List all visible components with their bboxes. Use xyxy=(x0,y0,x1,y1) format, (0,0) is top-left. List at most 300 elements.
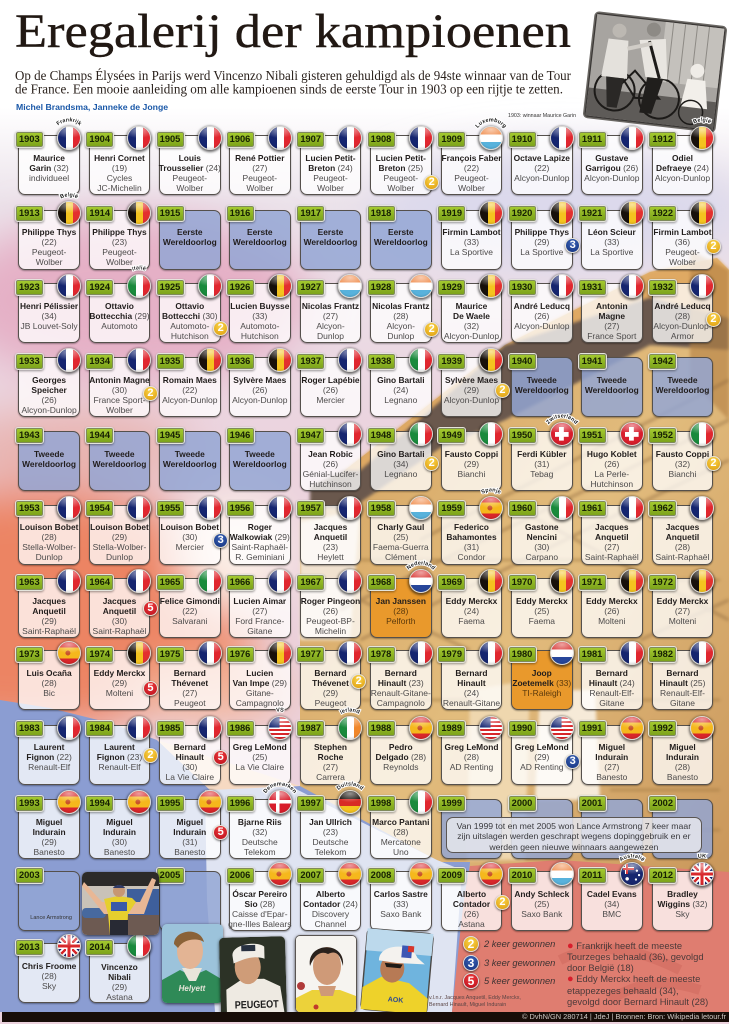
year tag xyxy=(578,280,606,294)
year tag xyxy=(438,280,465,294)
country label: Duitsland xyxy=(335,780,366,792)
year tag xyxy=(368,868,394,882)
year tag: 1986 xyxy=(230,723,250,733)
winner: (26) xyxy=(252,385,267,395)
year tag: 1985 xyxy=(160,723,180,733)
winner: Cycles xyxy=(107,173,132,183)
winner: Magne xyxy=(599,311,625,321)
year tag: 1930 xyxy=(512,282,532,292)
winner: Walkowiak (29) xyxy=(230,532,290,542)
legend item: 5 wins xyxy=(463,972,563,990)
year tag: 2002 xyxy=(652,798,673,808)
flag xyxy=(338,126,362,150)
badge: 2 wins: 2 xyxy=(499,896,505,908)
year tag xyxy=(508,501,536,516)
photo: Eddy Merckx: PEUGEOT xyxy=(235,998,279,1011)
year tag: 1934 xyxy=(89,356,110,366)
year tag xyxy=(226,796,254,810)
card 1931 xyxy=(578,273,644,345)
winner: Miguel xyxy=(106,817,133,827)
card 1991 xyxy=(578,715,644,787)
winner xyxy=(581,742,643,782)
winner: Hutchison xyxy=(171,331,209,341)
winner: Fausto Coppi xyxy=(656,449,709,459)
winner: Deutsche xyxy=(313,837,348,847)
winner: Speicher xyxy=(31,385,67,395)
winner xyxy=(370,889,432,919)
winner xyxy=(441,153,502,193)
winner: Sky xyxy=(675,909,690,919)
winner: (22) xyxy=(182,606,197,616)
flag xyxy=(408,496,432,520)
badge: 3 wins: 3 xyxy=(570,755,576,767)
flag xyxy=(620,422,644,446)
winner: gne-Illes Balears xyxy=(228,919,291,929)
winner: Bernard xyxy=(385,668,417,678)
card 1956 xyxy=(226,495,292,567)
year tag: 2011 xyxy=(582,870,602,880)
card 1941 xyxy=(578,347,644,419)
year tag xyxy=(508,646,536,662)
badge: 3 wins: 3 xyxy=(218,534,224,546)
winner: Joop xyxy=(532,668,552,678)
flag xyxy=(408,641,432,665)
winner: Banesto xyxy=(104,847,135,857)
winner: (29) xyxy=(534,237,549,247)
flag xyxy=(57,274,81,298)
winner: Peugeot- xyxy=(313,173,348,183)
flag xyxy=(479,716,503,740)
year tag: 1929 xyxy=(441,282,462,292)
winner: (31) xyxy=(464,542,479,552)
winner: Anquetil xyxy=(314,532,347,542)
year tag: 1948 xyxy=(371,430,391,440)
winner: Banesto xyxy=(33,847,65,857)
year tag xyxy=(649,796,676,810)
winner: Campagnolo xyxy=(236,698,284,708)
winner xyxy=(229,668,291,708)
card 1922 xyxy=(649,200,715,272)
winner: Wolber xyxy=(106,257,133,267)
winner: Renault-Elf xyxy=(28,762,70,772)
winner: Stella-Wolber- xyxy=(22,542,76,552)
year tag: 1916 xyxy=(230,208,250,218)
year tag: 1924 xyxy=(89,282,110,292)
war note: Wereldoorlog xyxy=(233,237,287,247)
winner: (33) xyxy=(393,899,408,909)
winner: René Pottier xyxy=(235,153,284,163)
winner: Jan Janssen xyxy=(376,596,426,606)
winner: Molteni xyxy=(106,688,133,698)
winner: Delgado (28) xyxy=(376,752,426,762)
winner: JB Louvet-Soly xyxy=(20,321,78,331)
year tag xyxy=(368,354,394,368)
flag xyxy=(479,348,503,372)
winner: (24) xyxy=(464,688,479,698)
card 1998 xyxy=(367,789,433,861)
winner xyxy=(376,153,426,193)
year tag: 1903 xyxy=(19,134,40,144)
year tag xyxy=(578,646,606,662)
card 1975 xyxy=(156,640,222,712)
card 1988 xyxy=(367,715,433,787)
badge: 5 wins: 5 xyxy=(218,751,224,763)
winner xyxy=(372,301,430,341)
flag xyxy=(198,641,222,665)
winner xyxy=(652,522,713,562)
card 1916 xyxy=(226,200,292,272)
winner: Henri Cornet xyxy=(94,153,145,163)
flag xyxy=(479,201,503,225)
winner: Alcyon-Dunlop xyxy=(514,173,569,183)
year tag: 1911 xyxy=(582,134,602,144)
flag xyxy=(268,716,292,740)
year tag: 1956 xyxy=(230,503,250,513)
winner xyxy=(441,375,502,405)
photo: Maurice Garin 1903 xyxy=(583,12,727,132)
country label: Italië xyxy=(130,264,147,272)
winner xyxy=(18,817,80,857)
year tag: 1926 xyxy=(230,282,250,292)
war note xyxy=(159,449,221,469)
year tag: 1965 xyxy=(160,576,180,586)
year tag: 1906 xyxy=(230,134,250,144)
winner xyxy=(22,227,76,267)
badge: 2 wins xyxy=(495,895,510,910)
year tag: 1922 xyxy=(652,208,673,218)
winner: Reynolds xyxy=(383,762,419,772)
badge: 3 wins xyxy=(565,238,580,253)
winner xyxy=(158,153,221,193)
winner: (32) xyxy=(252,827,267,837)
flag xyxy=(408,274,432,298)
card 1966 xyxy=(226,568,292,640)
winner: (32) xyxy=(675,459,690,469)
badge: 5 wins xyxy=(143,601,158,616)
winner: Faema xyxy=(529,616,555,626)
year tag xyxy=(297,206,324,221)
year tag: 1946 xyxy=(230,430,250,440)
winner: (30) xyxy=(182,762,197,772)
year tag: 1925 xyxy=(160,282,180,292)
year tag: 1964 xyxy=(89,576,110,586)
legend item: 2 wins xyxy=(463,935,563,953)
country label: Nederland xyxy=(405,560,437,572)
winner: Louison Bobet xyxy=(160,522,219,532)
badge: 5 wins: 5 xyxy=(147,602,153,614)
year tag xyxy=(86,940,113,954)
card 2009 xyxy=(438,861,504,933)
card 1912 xyxy=(649,125,715,197)
year tag xyxy=(438,132,465,146)
card 1968 xyxy=(367,568,433,640)
card 2012 xyxy=(649,861,715,933)
winner xyxy=(652,449,713,479)
card 1909 xyxy=(438,125,504,197)
year tag: 1962 xyxy=(652,503,673,513)
callout: Lance Armstrong: Van 1999 tot en met 2005 won Lance Armstrong 7 keer maar xyxy=(457,820,691,830)
year tag xyxy=(438,868,465,882)
winner: Saint-Raphaël xyxy=(93,626,146,636)
winner xyxy=(302,301,359,341)
card 1907 xyxy=(297,125,363,197)
winner: Fignon (22) xyxy=(26,752,72,762)
photo credits: v.l.n.r. Jacques Anquetil, Eddy Merckx, xyxy=(429,995,521,1001)
year tag xyxy=(649,868,676,882)
winner xyxy=(584,153,640,183)
year tag: 1907 xyxy=(300,134,321,144)
badge: 2 wins: 2 xyxy=(710,457,716,469)
winner: Carlos Sastre xyxy=(374,889,428,899)
winner: Ford France- xyxy=(235,616,284,626)
card 1947 xyxy=(297,421,363,493)
winner xyxy=(441,522,502,562)
winner: La Sportive xyxy=(590,247,633,257)
winner xyxy=(229,596,291,636)
flag xyxy=(127,348,151,372)
year tag xyxy=(578,428,606,442)
badge: 2 wins xyxy=(424,322,439,337)
winner: (30) xyxy=(534,542,549,552)
winner xyxy=(21,375,77,415)
winner: Alberto xyxy=(457,889,486,899)
winner: Wolber xyxy=(106,405,133,415)
winner xyxy=(29,153,69,183)
badge: 3 wins xyxy=(213,533,228,548)
winner: Carrera xyxy=(316,772,345,782)
year tag: 1976 xyxy=(230,648,250,658)
year tag: 1921 xyxy=(582,208,602,218)
year tag xyxy=(156,646,184,662)
year tag xyxy=(368,796,394,810)
country label: UK xyxy=(696,852,708,860)
year tag: 1980 xyxy=(512,648,532,658)
winner: (32) xyxy=(464,321,479,331)
card 1952 xyxy=(649,421,715,493)
card 1994 xyxy=(86,789,152,861)
war note: Tweede xyxy=(527,375,557,385)
winner xyxy=(444,301,499,341)
badge: 2 wins: 2 xyxy=(429,457,435,469)
winner: (26) xyxy=(323,385,338,395)
flag xyxy=(408,569,432,593)
flag xyxy=(57,716,81,740)
year tag xyxy=(16,428,43,442)
year tag: 1988 xyxy=(371,723,391,733)
flag xyxy=(268,126,292,150)
winner: Contador xyxy=(453,899,490,909)
card 1923 xyxy=(15,273,81,345)
card 1989 xyxy=(438,715,504,787)
winner: (28) xyxy=(42,678,57,688)
year tag xyxy=(16,721,43,736)
winner: Discovery xyxy=(312,909,349,919)
flag xyxy=(620,126,644,150)
legend item: 5 wins: 5 keer gewonnen xyxy=(484,976,555,986)
winner: (29) xyxy=(42,616,57,626)
year tag xyxy=(368,574,394,590)
card 1904 xyxy=(86,125,152,197)
card 1951 xyxy=(578,421,644,493)
war note: Tweede xyxy=(175,449,205,459)
winner: Nicolas Frantz xyxy=(372,301,429,311)
card 2006 xyxy=(226,861,292,933)
flag xyxy=(479,496,503,520)
flag: Frankrijk xyxy=(57,126,81,150)
year tag: 1963 xyxy=(19,576,40,586)
winner: Greg LeMond xyxy=(233,742,287,752)
winner: Greg LeMond xyxy=(444,742,498,752)
card 1939 xyxy=(438,347,504,419)
year tag xyxy=(16,868,43,882)
winner: Luis Ocaña xyxy=(27,668,72,678)
flag xyxy=(550,641,574,665)
flag xyxy=(127,201,151,225)
card 1973 xyxy=(15,640,81,712)
winner: Peugeot- xyxy=(102,247,137,257)
winner: (31) xyxy=(534,459,549,469)
winner: Octave Lapize xyxy=(514,153,570,163)
year tag xyxy=(297,574,324,590)
winner: Fignon (23) xyxy=(97,752,142,762)
year tag: 1910 xyxy=(512,134,532,144)
year tag xyxy=(368,132,394,146)
winner: Hinault xyxy=(176,752,204,762)
winner: (27) xyxy=(182,688,197,698)
winner: Thévenet xyxy=(312,678,349,688)
winner: (19) xyxy=(112,163,127,173)
war note xyxy=(229,449,291,469)
flag xyxy=(127,716,151,740)
winner xyxy=(587,301,636,341)
year tag: 1952 xyxy=(652,430,673,440)
year tag xyxy=(226,132,254,146)
winner xyxy=(511,522,573,562)
flag xyxy=(338,569,362,593)
winner: Breton (25) xyxy=(379,163,423,173)
year tag: 1941 xyxy=(582,356,602,366)
year tag xyxy=(86,206,113,221)
card 2007 xyxy=(297,861,363,933)
flag xyxy=(338,716,362,740)
year tag: 1950 xyxy=(512,430,532,440)
card 1911 xyxy=(578,125,644,197)
year tag: 1918 xyxy=(371,208,391,218)
winner: Tebag xyxy=(530,469,553,479)
year tag: 1955 xyxy=(160,503,180,513)
winner: Roger Lapébie xyxy=(301,375,360,385)
badge: 2 wins: 2 xyxy=(429,323,435,335)
flag xyxy=(408,422,432,446)
winner: BMC xyxy=(602,909,621,919)
winner: Molteni xyxy=(598,616,626,626)
flag xyxy=(127,641,151,665)
winner xyxy=(514,153,570,183)
winner xyxy=(653,301,712,341)
year tag xyxy=(297,501,324,516)
winner: Gitane xyxy=(247,626,272,636)
winner xyxy=(300,375,361,405)
flag xyxy=(690,496,714,520)
flag xyxy=(550,422,574,446)
flag xyxy=(57,641,81,665)
card 1972 xyxy=(649,568,715,640)
year tag: 1927 xyxy=(300,282,321,292)
year tag: 1971 xyxy=(582,576,602,586)
winner: De Waele xyxy=(453,311,490,321)
year tag xyxy=(508,721,536,736)
winner: (27) xyxy=(675,606,690,616)
badge: 3 wins: 3 xyxy=(570,239,576,251)
card 1948 xyxy=(367,421,433,493)
winner xyxy=(159,596,221,626)
winner: (22) xyxy=(534,163,549,173)
flag xyxy=(57,201,81,225)
winner: Jacques xyxy=(32,596,66,606)
winner: (24) xyxy=(464,606,479,616)
winner: (25) xyxy=(393,532,408,542)
winner: Lucien Petit- xyxy=(305,153,356,163)
card 1958 xyxy=(367,495,433,567)
flag xyxy=(690,862,714,886)
war note: Wereldoorlog xyxy=(163,237,217,247)
year tag xyxy=(156,354,184,368)
year tag xyxy=(649,721,676,736)
winner: Anquetil xyxy=(32,606,66,616)
card 2008 xyxy=(367,861,433,933)
year tag: 1958 xyxy=(371,503,391,513)
year tag xyxy=(16,940,43,954)
year tag xyxy=(156,428,184,442)
winner: Garrigou (26) xyxy=(585,163,638,173)
winner: (30) xyxy=(182,532,197,542)
flag xyxy=(690,126,714,150)
winner: La Vie Claire xyxy=(236,762,284,772)
card 1935 xyxy=(156,347,222,419)
winner: Bernard xyxy=(596,668,628,678)
flag xyxy=(550,716,574,740)
card 1905 xyxy=(156,125,222,197)
photo: Miguel Indurain: AOK xyxy=(387,996,404,1005)
flag xyxy=(479,862,503,886)
legend item: 3 wins xyxy=(463,954,563,972)
winner: Wolber xyxy=(669,257,696,267)
winner: Nencini xyxy=(527,532,557,542)
winner: Roger Pingeon xyxy=(301,596,360,606)
winner xyxy=(300,449,361,489)
winner: Banesto xyxy=(667,772,698,782)
winner: Eddy Merckx xyxy=(446,596,497,606)
winner: (22) xyxy=(182,385,197,395)
year tag: 1987 xyxy=(300,723,321,733)
badge: 3 wins xyxy=(565,754,580,769)
winner: Lucien Aimar xyxy=(233,596,286,606)
winner xyxy=(441,449,502,479)
winner: (30) xyxy=(112,385,127,395)
war note xyxy=(232,227,287,247)
winner: Bic xyxy=(43,688,55,698)
photo: Miguel Indurain xyxy=(358,926,436,1018)
winner: Garin (32) xyxy=(29,163,69,173)
winner: Renault-Elf- xyxy=(660,688,705,698)
year tag xyxy=(368,428,394,442)
winner: Indurain xyxy=(103,827,136,837)
winner: Génial-Lucifer- xyxy=(303,469,358,479)
winner: Saxo Bank xyxy=(521,909,562,919)
flag xyxy=(690,274,714,298)
photo credits xyxy=(429,995,521,1010)
winner: Vincenzo xyxy=(101,962,138,972)
